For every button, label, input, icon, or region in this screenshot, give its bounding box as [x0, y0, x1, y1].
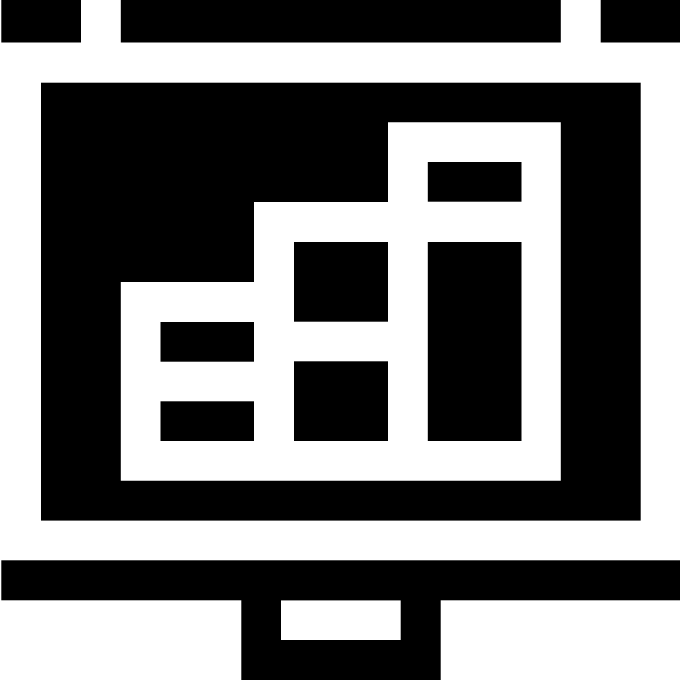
stepped bar chart: [121, 122, 561, 481]
bar 3: lower block: [428, 242, 522, 441]
bottom bar: [1, 560, 680, 600]
stand: [241, 600, 441, 680]
chart outline: [121, 122, 561, 481]
screen panel: [41, 83, 641, 521]
top bar: left segment: [1, 0, 81, 42]
top bar: right segment: [601, 0, 680, 42]
bar 2: upper block: [294, 242, 388, 322]
bar 1: upper block: [160, 322, 254, 362]
bar 2: lower block: [294, 361, 388, 441]
bar 1: lower block: [160, 401, 254, 441]
bar 3: upper block: [428, 162, 522, 202]
top bar: middle segment: [121, 0, 561, 42]
